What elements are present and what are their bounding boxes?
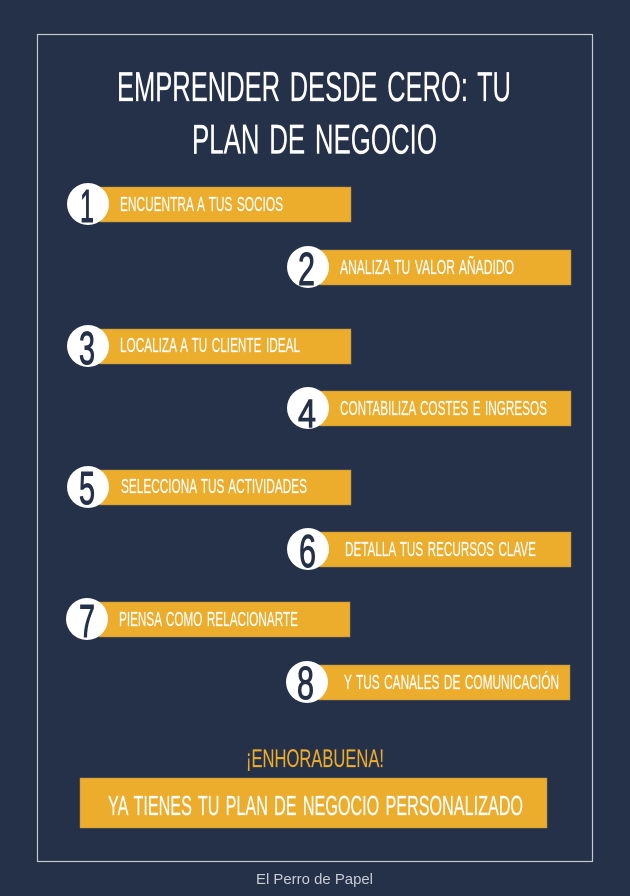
step 7: 7: [79, 595, 95, 647]
step 5: 5: [79, 462, 95, 514]
step 3: 3: [79, 322, 95, 374]
step 7: [66, 595, 350, 647]
step 1: [67, 180, 351, 232]
step 2: ANALIZA TU VALOR AÑADIDO: [340, 255, 514, 279]
step 2: 2: [298, 243, 315, 295]
title: PLAN DE NEGOCIO: [192, 116, 437, 162]
step 4: 4: [298, 392, 316, 436]
title: [117, 63, 511, 162]
step 4: [287, 387, 571, 436]
congratulations heading: ¡ENHORABUENA!: [246, 745, 384, 773]
step 1: ENCUENTRA A TUS SOCIOS: [120, 194, 283, 216]
step 3: [67, 322, 351, 374]
final banner: [80, 778, 547, 828]
step 6: 6: [299, 525, 316, 577]
step 5: [67, 462, 351, 514]
step 2: [287, 243, 571, 295]
step 8: 8: [297, 657, 314, 709]
step 1: 1: [80, 180, 94, 232]
step 3: LOCALIZA A TU CLIENTE IDEAL: [120, 335, 300, 357]
footer credit: El Perro de Papel: [256, 871, 373, 888]
step 6: [287, 525, 571, 577]
step 8: [286, 657, 570, 709]
step 7: PIENSA COMO RELACIONARTE: [119, 609, 298, 631]
step 5: SELECCIONA TUS ACTIVIDADES: [121, 476, 307, 498]
